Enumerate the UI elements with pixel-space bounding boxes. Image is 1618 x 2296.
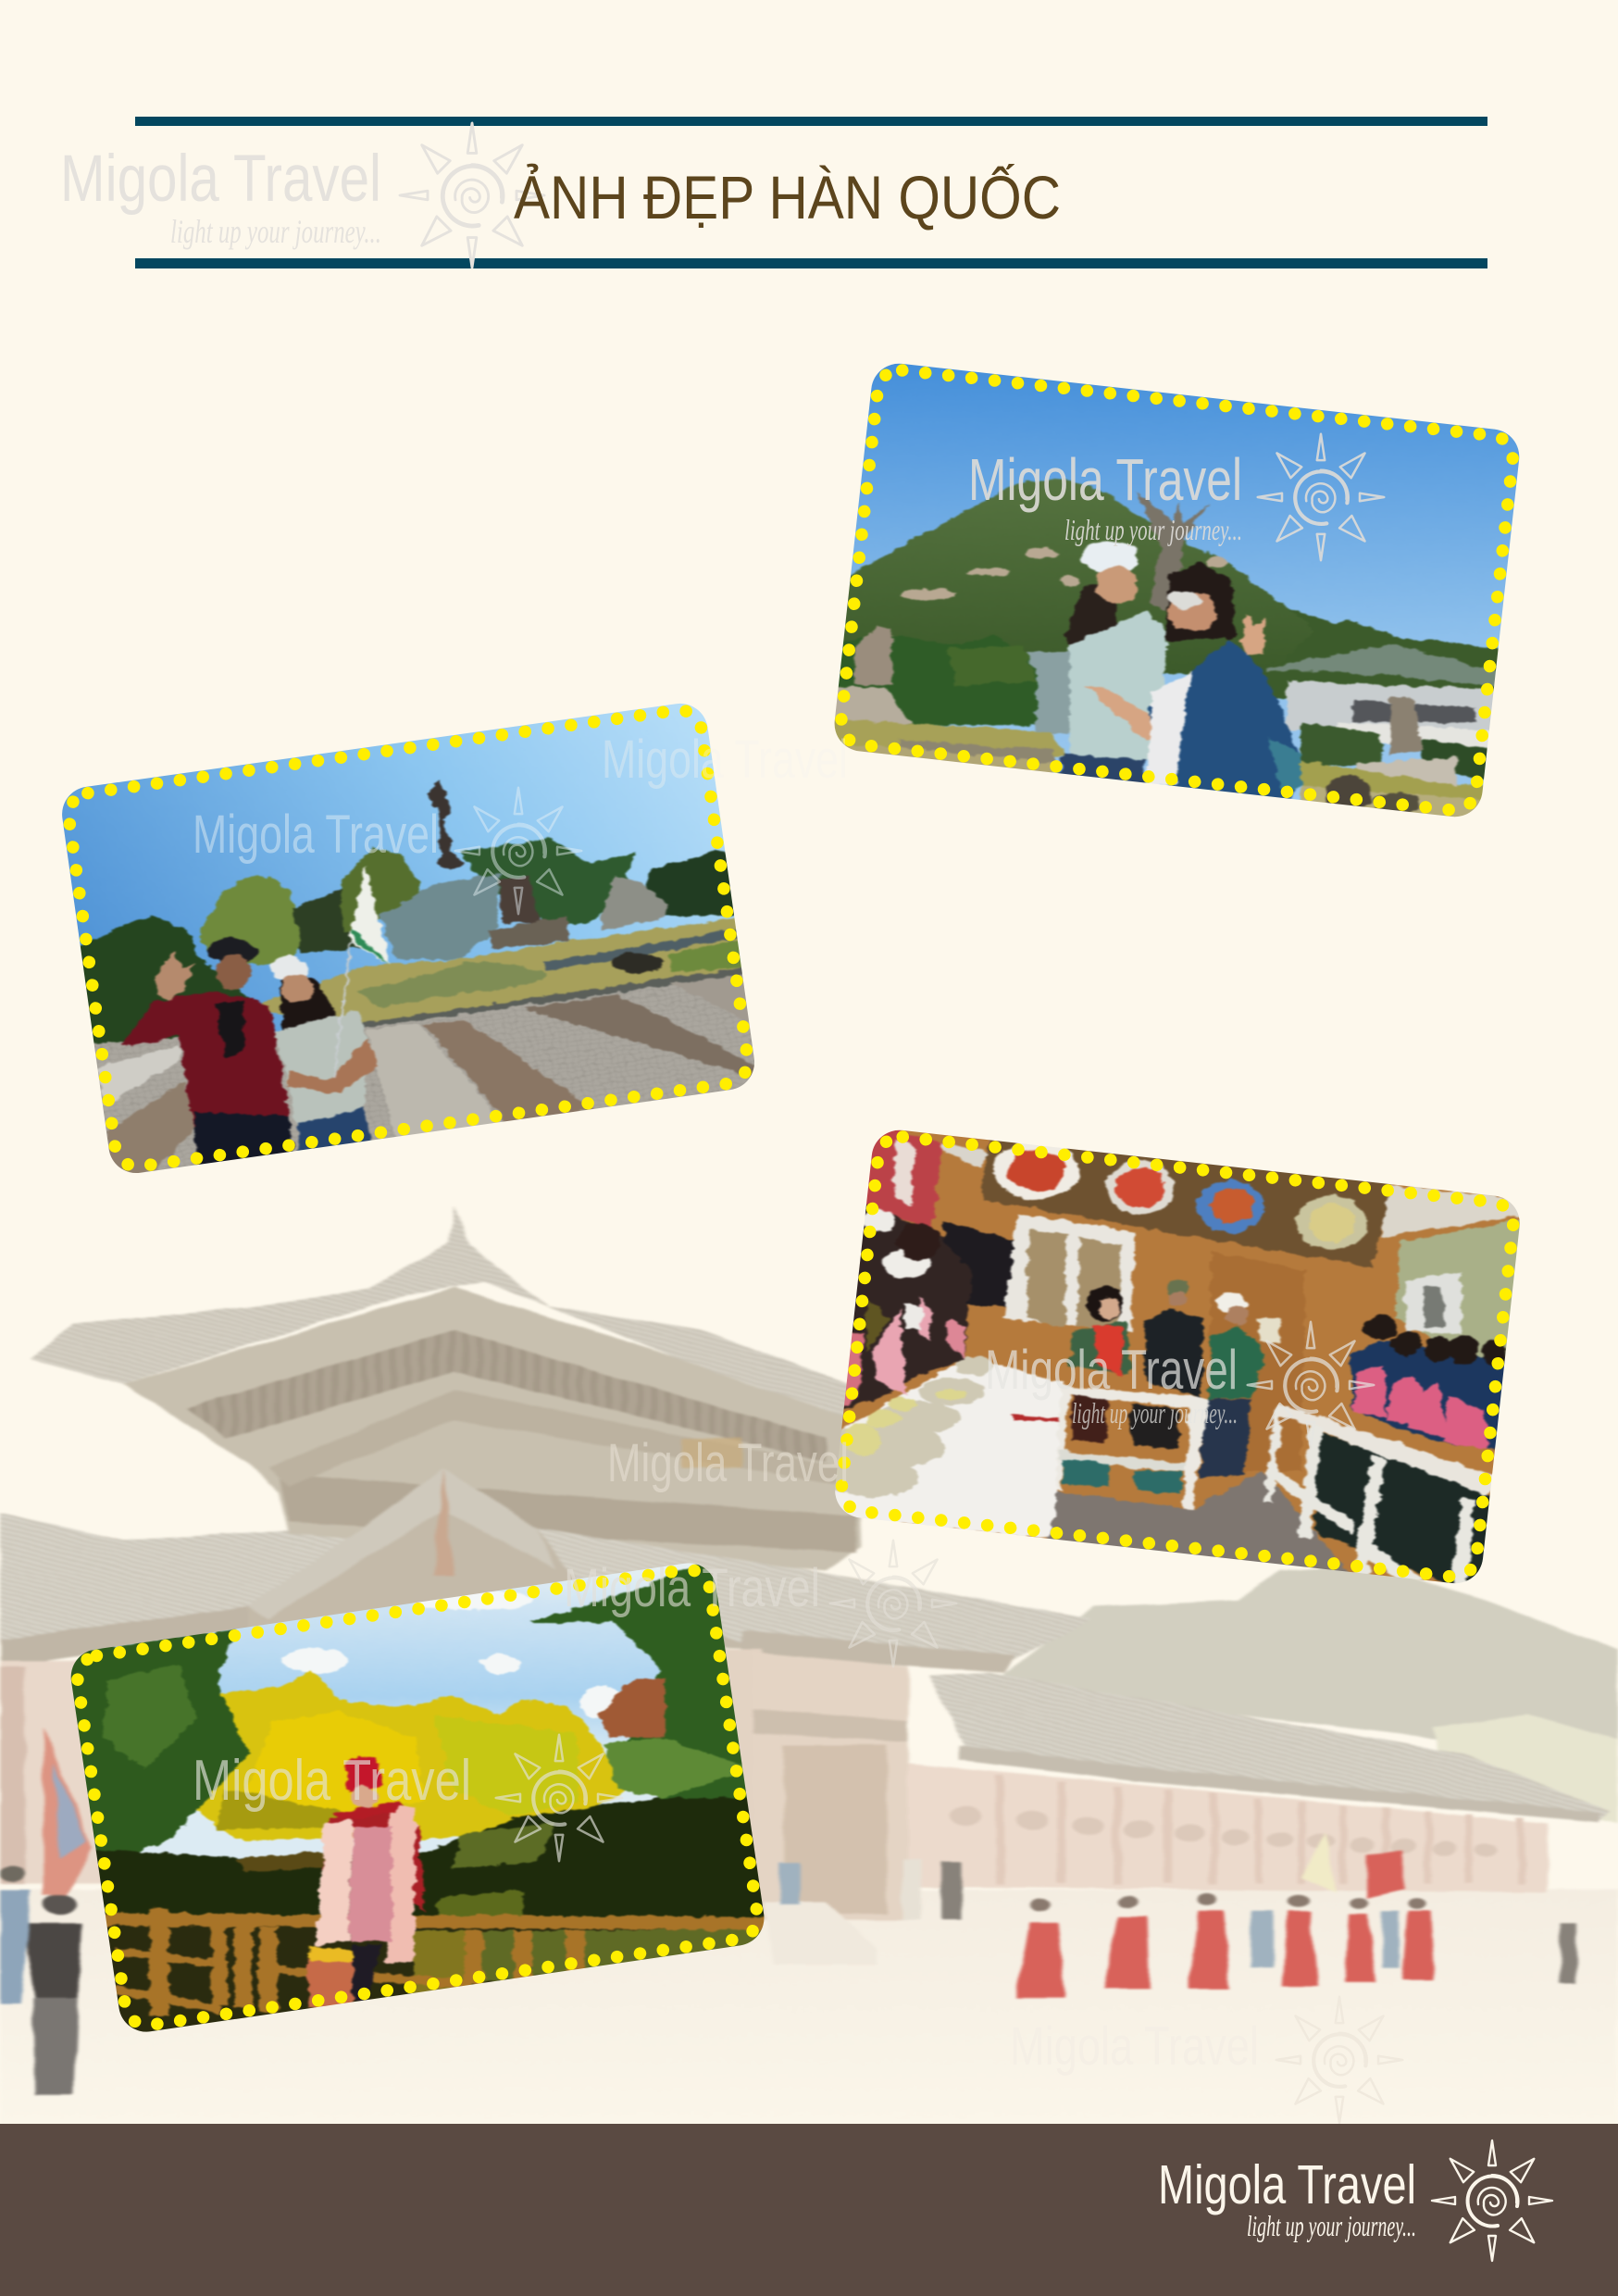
footer logo: light up your journey... (1247, 2209, 1416, 2242)
right row of students (1350, 1341, 1523, 1449)
pond and foliage (84, 1798, 778, 1926)
frame dots (840, 1134, 1515, 1579)
eaves lower left (0, 1606, 351, 1666)
ground (0, 1890, 1618, 2129)
left visitor in black (23, 1895, 82, 2094)
title: ẢNH ĐẸP HÀN QUỐC (514, 163, 1061, 231)
right hall roof (928, 1673, 1610, 1820)
woman on left (1063, 583, 1118, 645)
performers (1015, 1851, 1435, 1998)
left guard in blue (0, 1867, 31, 2004)
photo: mountain and Blue House with two women (835, 363, 1520, 817)
wooden fence (93, 1908, 774, 2016)
green wallpaper (1394, 1218, 1520, 1363)
watermark: faint upper tile: Migola Travel (602, 730, 848, 790)
photo: kimchi cooking class (835, 1129, 1520, 1583)
window (1003, 1213, 1136, 1331)
upper palace roof (31, 1206, 856, 1420)
center right palace roof (537, 1529, 1094, 1661)
center presenters (1070, 1321, 1131, 1376)
bystanders (941, 1863, 1576, 1983)
watermark: courtyard (1010, 1997, 1402, 2123)
flag (349, 866, 391, 966)
watermark: over palace roof: Migola Travel (564, 1558, 820, 1618)
right table (1275, 1403, 1500, 1498)
frame dots (75, 1566, 761, 2028)
footer logo: Migola Travel (1158, 2154, 1416, 2215)
woman on right (1166, 563, 1235, 641)
left table (819, 1356, 1060, 1538)
watermark: photo 3 (985, 1322, 1374, 1448)
watermark: photo 2: Migola Travel (193, 805, 439, 865)
header watermark logo: light up your journey... (170, 213, 381, 250)
header watermark logo (60, 123, 544, 268)
central gate (753, 1652, 908, 1920)
left row of students (833, 1204, 970, 1411)
center table (1050, 1385, 1209, 1509)
lower left palace roof (0, 1514, 361, 1646)
ginkgo trees (150, 1670, 628, 1840)
watermark: palace wall: Migola Travel (607, 1433, 849, 1493)
middle gable (248, 1468, 764, 1649)
banner (1302, 1832, 1337, 1892)
watermark: photo 3: light up your journey... (1072, 1396, 1238, 1429)
footer logo (1158, 2140, 1552, 2261)
header watermark logo: Migola Travel (60, 143, 381, 216)
header rules (135, 117, 1487, 268)
left flag (44, 1727, 93, 1896)
watermark: photo 4: Migola Travel (193, 1749, 471, 1813)
frame dots (839, 368, 1515, 813)
right tree (528, 1553, 774, 1802)
watermark: photo 1: light up your journey... (1064, 513, 1242, 546)
watermark: photo 3: Migola Travel (985, 1339, 1238, 1401)
TV (940, 1220, 1016, 1308)
woman (278, 977, 337, 1031)
frame dots (66, 707, 751, 1169)
food poster (982, 1130, 1393, 1267)
watermark: over palace roof (564, 1541, 956, 1666)
woman (320, 1802, 425, 1913)
left wall (0, 1661, 124, 1884)
stairs (764, 1902, 877, 1965)
left dark tree (56, 1629, 249, 1868)
mountain (990, 1565, 1618, 1812)
upper roof body (124, 1288, 862, 1570)
door (1206, 1252, 1306, 1471)
trees on right (1435, 1715, 1618, 1824)
watermark: photo 2 (193, 788, 581, 914)
watermark: photo 1 (968, 434, 1384, 560)
footer bar (0, 2124, 1618, 2296)
watermark: photo 1: Migola Travel (968, 446, 1242, 513)
wall behind photo (124, 1649, 764, 1890)
watermark: courtyard: Migola Travel (1010, 2016, 1259, 2077)
man (122, 992, 290, 1127)
background photo: palace courtyard (0, 1206, 1618, 2129)
watermark: photo 4 (193, 1735, 622, 1861)
signboard (681, 1438, 743, 1468)
photo: woman by pond with ginkgo trees (46, 1546, 787, 2046)
photo: plaza with monument and couple (62, 704, 755, 1173)
floor (1046, 1471, 1350, 1572)
right hall wall (908, 1763, 1548, 1892)
